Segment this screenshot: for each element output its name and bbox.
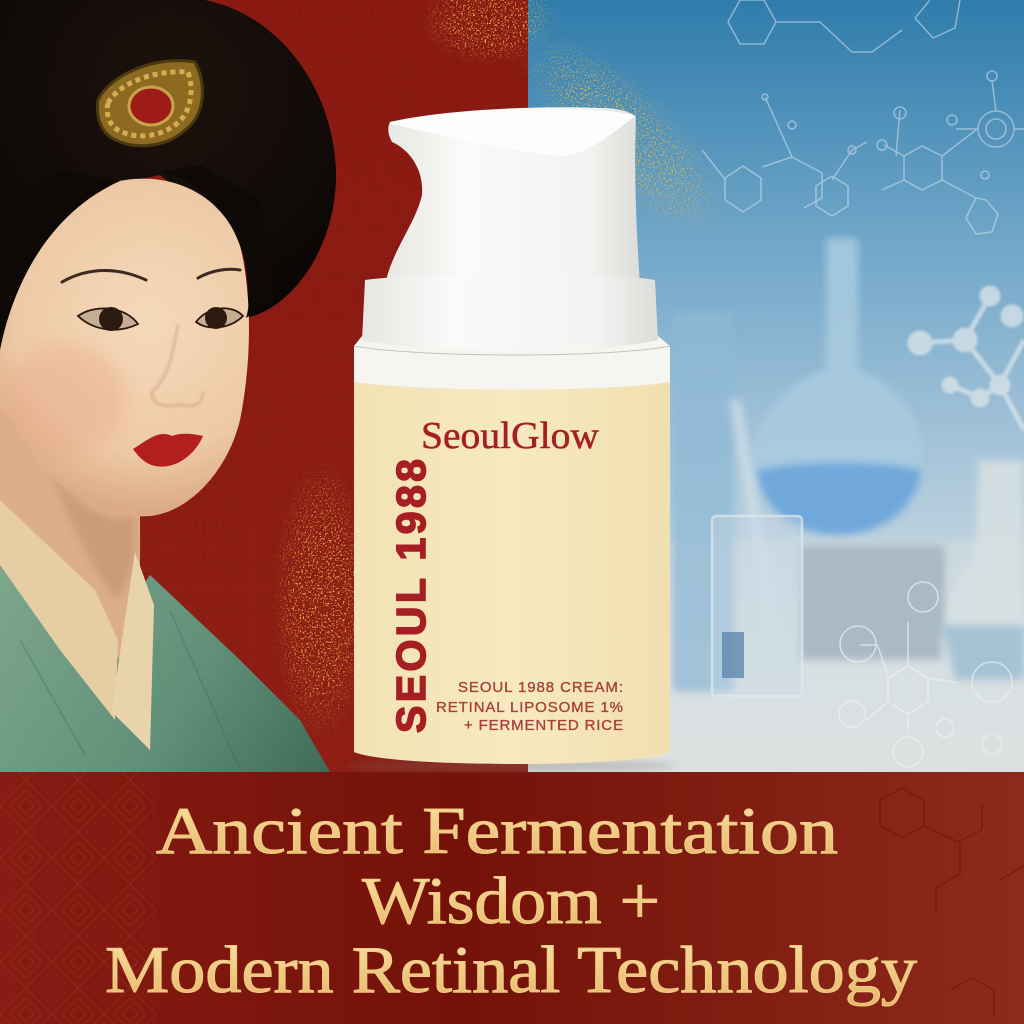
eyes — [78, 307, 243, 331]
robe — [0, 555, 330, 772]
face — [0, 179, 249, 516]
ring edge line — [354, 346, 670, 355]
headline — [105, 794, 918, 1007]
lips — [133, 434, 203, 467]
molecule: pale ball and stick — [910, 288, 1024, 430]
bottle shadow — [347, 760, 677, 772]
woman portrait — [0, 0, 336, 772]
background: red heritage panel — [0, 0, 528, 772]
bottle body — [354, 382, 670, 764]
robe collar — [0, 500, 154, 750]
hairline left — [0, 170, 120, 350]
robe folds — [20, 610, 240, 770]
pump collar — [362, 274, 658, 350]
clear ring — [354, 336, 670, 394]
hair — [0, 0, 336, 345]
eyebrows — [62, 269, 240, 282]
neck shadow — [50, 470, 135, 600]
nose — [152, 325, 203, 406]
pump head — [385, 107, 640, 285]
product bottle — [347, 107, 677, 772]
hairline right — [160, 165, 275, 318]
background: blue science panel — [528, 0, 1024, 772]
product description: + FERMENTED RICE — [464, 717, 623, 734]
neck — [0, 400, 140, 660]
molecule diagrams — [702, 0, 1024, 234]
gold dust — [274, 0, 726, 735]
headline: Ancient Fermentation — [156, 794, 838, 868]
banner — [0, 772, 1024, 1024]
hair ornament — [97, 61, 202, 146]
headline: Wisdom + — [362, 864, 660, 938]
molecule: lower right line drawing — [839, 582, 1012, 767]
vertical product name: SEOUL 1988 — [388, 459, 434, 733]
laboratory glassware, blurred — [660, 238, 1024, 772]
headline: Modern Retinal Technology — [105, 933, 918, 1007]
product description — [436, 679, 623, 734]
product description: RETINAL LIPOSOME 1% — [436, 699, 623, 716]
brand logo: SeoulGlow — [421, 415, 600, 457]
product description: SEOUL 1988 CREAM: — [458, 679, 623, 696]
pump top surface — [390, 109, 636, 156]
blush — [5, 345, 125, 455]
